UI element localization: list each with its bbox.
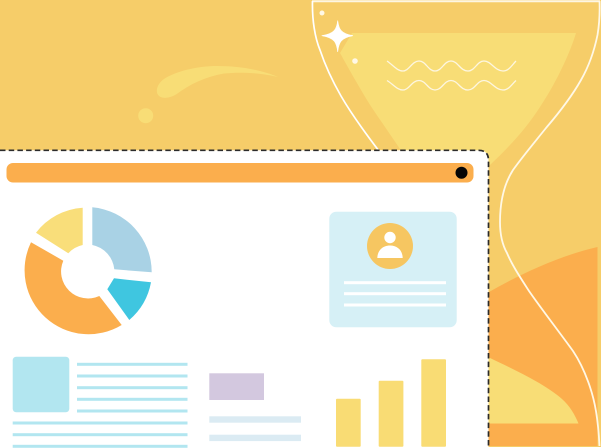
block: purple label and text lines — [209, 373, 301, 441]
card background — [329, 212, 457, 327]
text lines — [13, 363, 188, 448]
donut segment: orange — [25, 242, 122, 334]
hourglass: top yellow sand — [340, 33, 576, 165]
icon: sparkle star — [322, 20, 353, 52]
icon: avatar circle — [367, 223, 413, 269]
icon: small glint dot lower — [352, 58, 358, 64]
icon: avatar body — [377, 246, 403, 258]
icon: lower water wave — [387, 80, 516, 90]
card text lines — [344, 281, 446, 306]
donut segment: light blue — [92, 207, 152, 272]
decoration: light dot — [138, 108, 153, 123]
hourglass — [312, 1, 600, 446]
image placeholder square — [13, 357, 69, 412]
donut segment: yellow — [36, 208, 83, 253]
donut segment: cyan — [107, 278, 151, 320]
bar 2 — [379, 381, 403, 447]
hourglass: bottom orange sand body — [470, 247, 598, 446]
bar 1 — [336, 399, 361, 447]
panel: dashboard window — [0, 150, 488, 448]
window: orange title bar — [6, 163, 474, 182]
icon: upper water wave — [387, 61, 516, 71]
chart: bar chart — [336, 359, 446, 447]
hourglass: right glass outline — [500, 1, 600, 446]
decoration: light swoosh highlight — [157, 66, 278, 98]
pale blue lines — [209, 416, 301, 441]
card: profile card — [329, 212, 457, 327]
purple label — [209, 373, 264, 400]
window: white body with dashed border — [0, 150, 488, 448]
icon: black window button — [456, 167, 468, 179]
window: dashed top and right border — [0, 150, 488, 448]
chart: donut chart — [25, 207, 152, 334]
hourglass: left glass outline — [312, 1, 379, 151]
bar 3 — [421, 359, 446, 447]
block: image placeholder and text lines — [13, 357, 188, 448]
icon: avatar head — [384, 232, 396, 243]
hourglass: bottom yellow sand pile — [470, 350, 578, 424]
icon: small glint dot upper — [320, 10, 324, 16]
hourglass: top rim line — [312, 0, 600, 2]
